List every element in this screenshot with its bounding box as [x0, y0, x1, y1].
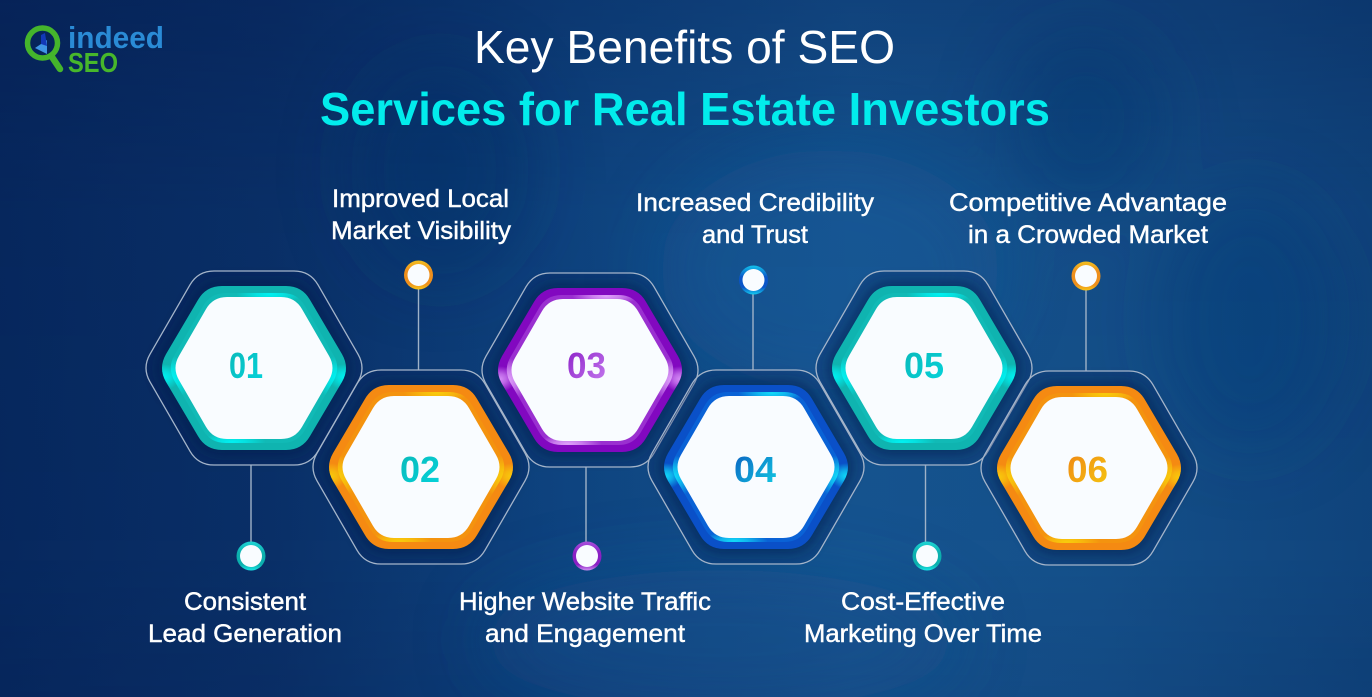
dot 06 — [1072, 262, 1100, 290]
connector: 02 — [418, 288, 420, 370]
hexagon 01 — [146, 271, 362, 465]
label: Increased Credibility and Trust: and Trust — [702, 221, 808, 249]
connector: 03 — [585, 467, 587, 545]
label: Improved Local Market Visibility: Market Visibility — [331, 217, 512, 245]
number 03: 03 — [567, 345, 606, 386]
label: Increased Credibility and Trust: Increased Credibility — [636, 189, 875, 217]
logo wordmark: indeed: indeed — [68, 20, 164, 55]
number 05: 05 — [904, 345, 944, 386]
label: Improved Local Market Visibility — [331, 185, 512, 245]
hexagon 03 — [482, 273, 698, 467]
logo — [28, 20, 164, 78]
hexagon 06 — [981, 371, 1197, 565]
label: Consistent Lead Generation: Consistent — [184, 588, 306, 616]
label: Competitive Advantage in a Crowded Market: in a Crowded Market — [968, 221, 1208, 249]
title line 1: Key Benefits of SEO — [474, 21, 895, 73]
logo wordmark: SEO: SEO — [68, 47, 118, 78]
number 01: 01 — [229, 345, 263, 386]
dot 05 — [912, 542, 942, 570]
dot 02 — [404, 260, 433, 290]
dot 01 — [236, 542, 266, 570]
label: Cost-Effective Marketing Over Time: Cost-Effective — [841, 588, 1005, 616]
label: Cost-Effective Marketing Over Time: Marketing Over Time — [804, 620, 1042, 648]
connector: 01 — [250, 465, 252, 545]
connector: 05 — [924, 465, 926, 545]
label: Consistent Lead Generation — [148, 588, 342, 648]
number 02: 02 — [400, 449, 440, 490]
hexagon 02 — [313, 370, 529, 564]
dot 04 — [739, 266, 768, 294]
title line 2: Services for Real Estate Investors — [320, 83, 1050, 135]
label: Higher Website Traffic and Engagement — [459, 588, 711, 648]
icon: magnifier — [28, 28, 60, 69]
label: Competitive Advantage in a Crowded Market: Competitive Advantage — [949, 189, 1227, 217]
number 06: 06 — [1067, 449, 1108, 490]
dot 03 — [572, 542, 602, 570]
number 04: 04 — [734, 449, 776, 490]
connector: 04 — [752, 293, 754, 370]
label: Cost-Effective Marketing Over Time — [804, 588, 1042, 648]
label: Improved Local Market Visibility: Improved Local — [332, 185, 509, 213]
title — [320, 21, 1050, 135]
label: Consistent Lead Generation: Lead Generation — [148, 620, 342, 648]
hexagon 04 — [648, 370, 864, 564]
label: Higher Website Traffic and Engagement: and Engagement — [485, 620, 685, 648]
label: Higher Website Traffic and Engagement: Higher Website Traffic — [459, 588, 711, 616]
label: Increased Credibility and Trust — [636, 189, 875, 249]
label: Competitive Advantage in a Crowded Market — [949, 189, 1227, 249]
connector: 06 — [1085, 288, 1087, 371]
hexagon 05 — [816, 271, 1032, 465]
